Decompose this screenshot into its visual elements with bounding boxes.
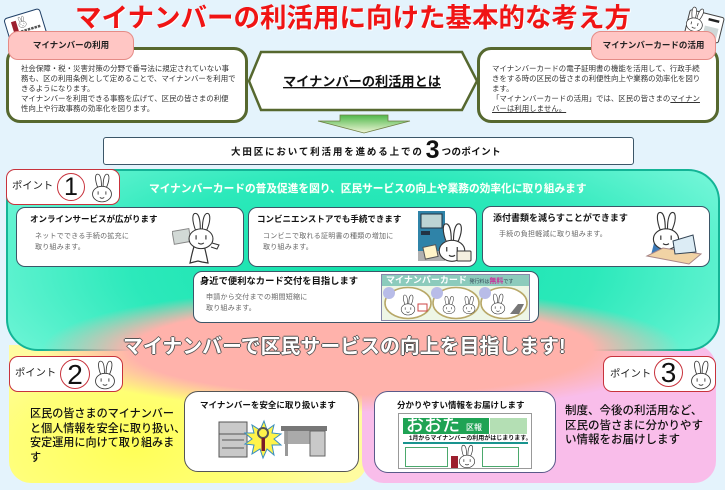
card text bbox=[263, 232, 394, 250]
icon: rabbit bbox=[92, 174, 112, 202]
body text: きるようになります。 bbox=[21, 84, 94, 93]
tag number bbox=[60, 359, 90, 389]
card text: 取り組みます。 bbox=[35, 244, 85, 250]
body text: 務も、区の利用条例として定めることで、マイナンバーを利用で bbox=[21, 74, 236, 83]
banner text: 大田区において利活用を進める上での3つのポイント bbox=[231, 136, 501, 164]
card text: 手続の負担軽減に取り組みます。 bbox=[499, 231, 607, 238]
banner: card is free bbox=[381, 274, 530, 321]
newsletter bbox=[398, 413, 532, 469]
point 2 text: 区民の皆さまのマイナンバー bbox=[30, 408, 174, 420]
banner header: マイナンバーカード 発行料は無料です bbox=[386, 275, 513, 285]
center hexagon heading bbox=[248, 50, 477, 112]
tag text: ポイント bbox=[15, 368, 56, 379]
pink glow bbox=[42, 288, 682, 412]
title: マイナンバーの利活用に向けた基本的な考え方 bbox=[75, 3, 631, 33]
point 2 text: と個人情報を安全に取り扱い、 bbox=[30, 422, 185, 434]
icon: rabbit card bbox=[684, 6, 724, 44]
tag number bbox=[57, 173, 85, 201]
tag number: 2 bbox=[67, 359, 83, 390]
card: online services bbox=[16, 207, 244, 267]
point 2 text bbox=[30, 407, 185, 464]
tag text: ポイント bbox=[610, 369, 651, 380]
newsletter left note bbox=[405, 447, 448, 467]
card: safe handling bbox=[184, 391, 359, 472]
body text bbox=[21, 64, 236, 113]
point 3 text: 制度、今後の利活用など、 bbox=[565, 405, 702, 417]
card heading: 添付書類を減らすことができます bbox=[493, 213, 628, 223]
point 1 tag bbox=[6, 169, 120, 205]
body text: 性向上や行政事務の効率化を図ります。 bbox=[21, 104, 154, 113]
panel: my number use bbox=[6, 47, 248, 123]
card text bbox=[35, 232, 129, 250]
card text bbox=[206, 293, 308, 312]
card text: 取り組みます。 bbox=[206, 304, 256, 312]
panel: point 2 background bbox=[9, 345, 367, 483]
body text: バーは利用しません。 bbox=[492, 104, 566, 113]
main message: マイナンバーで区民サービスの向上を目指します! bbox=[123, 336, 566, 358]
point 1 subheading: マイナンバーカードの普及促進を図り、区民サービスの向上や業務の効率化に取り組みます bbox=[149, 183, 587, 195]
point 2 tag bbox=[9, 356, 123, 392]
point 2 text: す bbox=[30, 452, 41, 464]
newsletter rabbit bbox=[451, 444, 475, 468]
card heading: マイナンバーを安全に取り扱います bbox=[200, 400, 336, 410]
newsletter rule bbox=[403, 442, 528, 444]
card: convenience stores bbox=[248, 207, 477, 267]
label: my number card use: マイナンバーカードの活用 bbox=[603, 40, 704, 50]
three application methods bbox=[383, 286, 528, 320]
card heading: 身近で便利なカード交付を目指します bbox=[200, 276, 358, 286]
card: clear information bbox=[374, 391, 556, 473]
body text: 「マイナンバーカードの活用」では、区民の皆さまのマイナン bbox=[492, 94, 700, 103]
card: card issuance bbox=[193, 271, 539, 323]
card heading: コンビニエンストアでも手続できます bbox=[257, 214, 401, 224]
tag number: 1 bbox=[64, 173, 78, 201]
card heading: 分かりやすい情報をお届けします bbox=[397, 400, 525, 410]
card heading: オンラインサービスが広がります bbox=[30, 214, 158, 224]
body text: きをする時の区民の皆さまの利便性向上や業務の効率化を図り bbox=[492, 74, 700, 83]
tag number: 3 bbox=[661, 357, 676, 388]
newsletter right note bbox=[482, 447, 519, 467]
card: fewer attachments bbox=[482, 206, 710, 267]
card text: 取り組みます。 bbox=[263, 244, 313, 250]
point 3 text: 区民の皆さまに分かりやす bbox=[565, 420, 703, 432]
body text bbox=[492, 64, 700, 113]
banner: three points bbox=[103, 137, 634, 165]
panel: point 1 background bbox=[6, 169, 720, 351]
label: my number use: マイナンバーの利用 bbox=[33, 40, 109, 50]
icon: number card bbox=[4, 8, 46, 38]
newsletter headline: 1月からマイナンバーの利用がはじまります。 bbox=[409, 436, 532, 442]
icon: rabbit bbox=[691, 360, 711, 390]
card text: コンビニで取れる証明書の種類の増加に bbox=[263, 233, 394, 240]
panel: point 3 background bbox=[362, 345, 716, 483]
label: my number card use bbox=[591, 31, 716, 60]
body text: マイナンバーを利用できる事務を広げて、区民の皆さまの利便 bbox=[21, 94, 229, 103]
icon: rabbit at kiosk bbox=[418, 211, 472, 262]
card text: ネットでできる手続の拡充に bbox=[35, 233, 129, 240]
label: my number use bbox=[8, 31, 134, 60]
point 3 text: い情報をお届けします bbox=[565, 434, 680, 446]
icon: rabbit at computer bbox=[646, 212, 702, 264]
arrow bbox=[318, 114, 410, 134]
body text: ます。 bbox=[492, 84, 514, 93]
point 3 text bbox=[565, 404, 703, 446]
icon: rabbit bbox=[95, 360, 115, 390]
icon: cabinet key and desk bbox=[218, 420, 327, 460]
tag number bbox=[654, 358, 683, 387]
body text: 社会保障・税・災害対策の分野で番号法に規定されていない事 bbox=[21, 64, 229, 73]
center hexagon heading: マイナンバーの利活用とは bbox=[283, 73, 441, 89]
icon: rabbit holding card bbox=[172, 212, 220, 264]
card text: 申請から交付までの期間短縮に bbox=[206, 294, 308, 301]
tag text: ポイント bbox=[12, 181, 53, 192]
body text: マイナンバーカードの電子証明書の機能を活用して、行政手続 bbox=[492, 64, 700, 73]
panel: my number card use bbox=[477, 47, 719, 123]
point 2 text: 安定運用に向けて取り組みま bbox=[30, 437, 174, 449]
newsletter notice block bbox=[490, 418, 527, 434]
point 3 tag bbox=[603, 356, 716, 392]
